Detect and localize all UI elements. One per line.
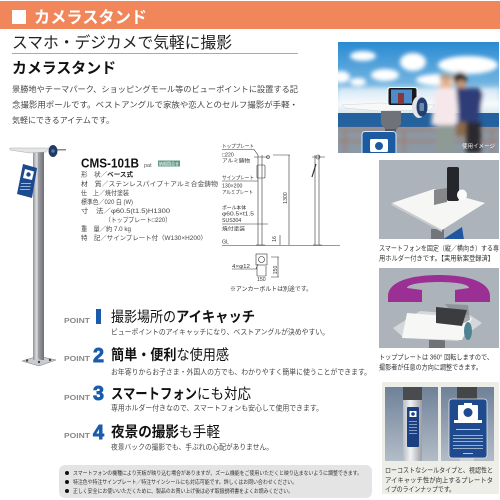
point 1: アイキャッチ — [176, 309, 255, 326]
photo: usage image — [332, 42, 499, 156]
heading: product name: カメラスタンド — [12, 60, 116, 77]
photo: usage image: 使用イメージ — [462, 142, 495, 150]
specification list: 重 量／約 7.0 kg — [81, 224, 131, 233]
point 2: お年寄りからお子さま・外国人の方でも、わかりやすく簡単に使うことができます。 — [111, 368, 371, 376]
photo: plate type — [441, 387, 494, 461]
technical drawing: トッププレート — [222, 143, 254, 150]
point 1: POINT — [64, 316, 90, 325]
point 4: も手軽 — [179, 424, 220, 441]
point 2: 簡単・便利 — [111, 346, 176, 364]
photo: smartphone holder — [379, 160, 499, 240]
technical drawing: 4×φ12 — [232, 264, 250, 270]
model name: CMS-101B — [81, 156, 139, 170]
point 4: 4 — [93, 422, 105, 444]
technical drawing: ※アンカーボルトは別途です。 — [230, 285, 312, 293]
specification list: 仕 上／焼付塗装 — [81, 188, 130, 197]
specification list: 寸 法／φ60.5(t1.5)H1300 — [81, 206, 171, 215]
caption: sign lineup: イプのラインナップです。 — [385, 486, 455, 494]
point 2 — [64, 345, 371, 376]
intro text: 気軽にできるアイテムです。 — [12, 115, 114, 125]
product illustration: camera stand — [10, 145, 66, 366]
specification list: 特 記／サインプレート付（W130×H200） — [81, 233, 207, 242]
technical drawing: φ60.5×t1.5 — [222, 212, 254, 218]
point 3: 3 — [93, 383, 104, 405]
header band — [0, 1, 500, 29]
point 3: にも対応 — [197, 386, 251, 403]
point 1 — [64, 309, 329, 336]
point 1: ビューポイントのアイキャッチになり、ベストアングルが決めやすい。 — [111, 328, 329, 336]
point 4: POINT — [64, 431, 90, 440]
caption: sign lineup — [385, 466, 493, 494]
caption: holder — [379, 244, 499, 262]
footnote panel — [59, 465, 372, 498]
point 2: な使用感 — [176, 347, 229, 364]
technical drawing: 16 — [272, 236, 278, 242]
photo: seal type — [385, 387, 438, 461]
specification list: （トッププレート□220） — [105, 216, 171, 224]
point 4: 夜景バックの撮影でも、手ぶれの心配がありません。 — [111, 442, 273, 452]
intro text — [12, 84, 298, 125]
technical drawing: アルミ鋳物 — [222, 156, 250, 164]
technical drawing — [222, 143, 340, 293]
footnote panel: 特注色や特注サインプレート／特注サインシールにも対応可能です。詳しくはお問い合わせください。 — [73, 478, 297, 486]
intro text: 景勝地やテーマパーク、ショッピングモール等のビューポイントに設置する記 — [12, 84, 298, 94]
technical drawing: 焼付塗装 — [222, 224, 245, 232]
footnote panel: 正しく安全にお使いいただくために、製品のお買い上げ後は必ず取扱説明書をよくお読みください。 — [73, 487, 293, 495]
model name: pat — [144, 163, 152, 169]
footnote panel: スマートフォンの機種により天板が映り込む場合がありますが、ズーム機能をご使用いただくと映り込まないように調整できます。 — [73, 469, 362, 477]
heading: tagline: スマホ・デジカメで気軽に撮影 — [12, 33, 232, 52]
model name: 納期問合せ — [159, 160, 180, 168]
technical drawing: 1300 — [283, 192, 289, 204]
technical drawing: ポール本体 — [222, 204, 247, 212]
caption: top plate: 撮影者が任意の方向に調整できます。 — [379, 362, 482, 372]
technical drawing: □220 — [222, 152, 234, 158]
photo: rotating top plate — [379, 268, 499, 348]
technical drawing: 150 — [273, 266, 279, 274]
point 2: 2 — [93, 345, 104, 367]
technical drawing: アルミプレート — [222, 189, 253, 196]
technical drawing: GL — [222, 240, 229, 246]
technical drawing: 150 — [257, 277, 266, 283]
intro text: 念撮影用ポールです。ベストアングルで家族や恋人とのセルフ撮影が手軽・ — [12, 100, 298, 110]
panel: sign lineup — [382, 382, 499, 494]
technical drawing: サインプレート — [222, 174, 254, 182]
caption: top plate — [379, 354, 493, 372]
point 3: スマートフォン — [111, 387, 197, 403]
technical drawing: 130×200 — [222, 184, 242, 190]
specification list — [81, 170, 218, 242]
specification list: 標準色／020 白 (W) — [81, 197, 133, 206]
point 3: 専用ホルダー付きなので、スマートフォンも安心して使用できます。 — [111, 404, 323, 412]
point 4: 夜景の撮影 — [111, 423, 179, 441]
technical drawing: SUS304 — [222, 218, 241, 224]
point 2: POINT — [64, 354, 90, 363]
specification list: 材 質／ステンレスパイプ＋アルミ合金鋳物 — [81, 179, 218, 188]
point 3: POINT — [64, 393, 90, 402]
point 4 — [64, 422, 273, 452]
point 1: 撮影場所の — [111, 309, 176, 326]
header band: カメラスタンド — [34, 8, 147, 27]
model name — [81, 156, 180, 170]
specification list: 形 状／ベース式 — [81, 170, 134, 178]
point 3 — [64, 383, 323, 412]
